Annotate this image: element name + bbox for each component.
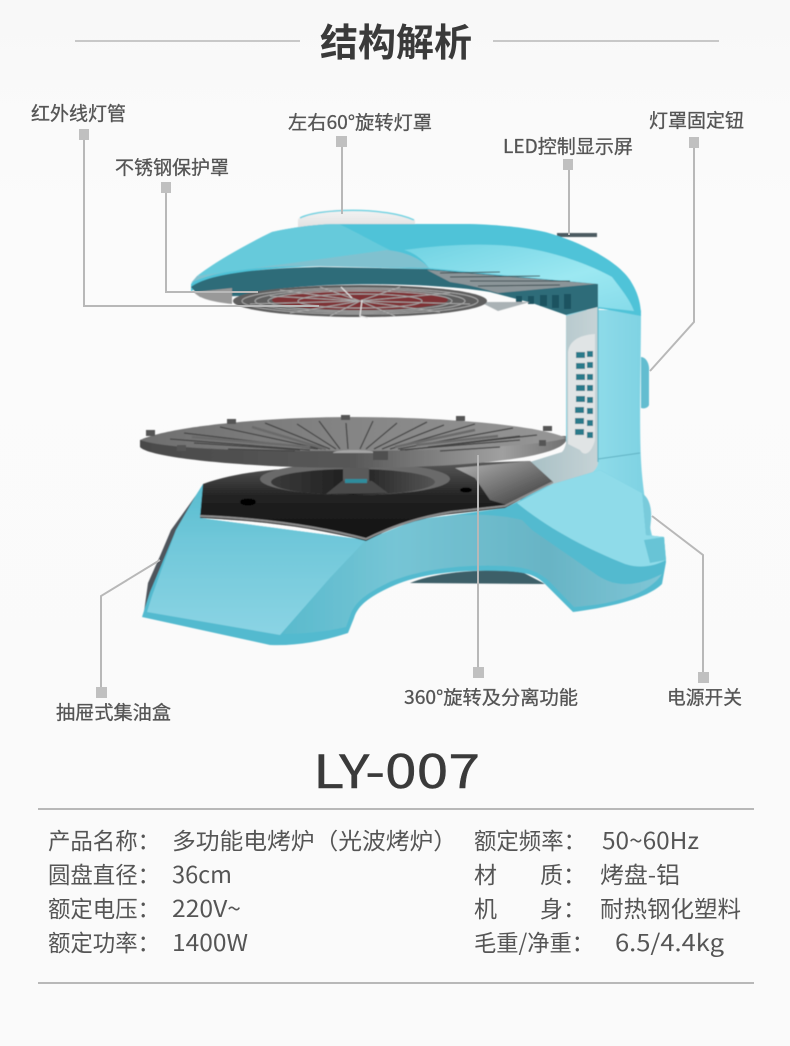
black tray plate: [200, 461, 553, 541]
spec: right column labels: 机: [474, 890, 497, 924]
product illustration: electric grill: [140, 209, 666, 645]
base shadow under arch: [410, 570, 545, 584]
spec: left column values: 1400W: [172, 924, 248, 958]
spec: right column values: 50~60Hz: [602, 822, 699, 856]
base body: [142, 470, 666, 645]
leader: 电源开关: [652, 516, 742, 710]
model name: LY-007: [313, 736, 480, 802]
infrared lamp and guard: [233, 285, 487, 318]
leader: 红外线灯管: 红外线灯管: [31, 99, 126, 126]
vent holes: [575, 351, 593, 438]
rotating stem and bowl: [260, 463, 450, 495]
title: 结构解析: 结构解析: [320, 12, 472, 67]
divider top: [38, 808, 754, 810]
spec: right column labels: 额定频率：: [474, 822, 586, 856]
column: [520, 307, 660, 590]
spec: right column labels: 材: [474, 856, 497, 890]
leader: 抽屉式集油盒: 抽屉式集油盒: [56, 698, 171, 725]
leader: 360°旋转及分离功能: [404, 455, 578, 710]
spec: right column values: 耐热钢化塑料: [600, 890, 741, 924]
leader: 抽屉式集油盒: [56, 560, 171, 725]
spec: right column values: 6.5/4.4kg: [615, 924, 724, 958]
hood: [191, 224, 641, 316]
spec: left column values: [172, 822, 457, 958]
spec: right column labels: 质：: [540, 856, 586, 890]
spec: right column labels: [474, 822, 594, 958]
spec: right column labels: 身：: [540, 890, 586, 924]
spec: left column values: 36cm: [172, 856, 232, 890]
spec: right column values: 烤盘-铝: [600, 856, 680, 890]
spec: right column labels: 毛重/净重：: [474, 924, 594, 958]
power switch: [643, 494, 651, 540]
LED control display: [557, 233, 597, 237]
lamp fixing knob: [641, 357, 649, 408]
leader: LED控制显示屏: [503, 132, 633, 235]
spec: left column labels: 额定功率：: [48, 924, 160, 958]
leader: 灯罩固定钮: [649, 106, 744, 371]
spec: left column values: 多功能电烤炉（光波烤炉）: [172, 822, 457, 856]
plate studs: [146, 415, 552, 451]
spec: left column values: 220V~: [172, 890, 241, 924]
leader: 不锈钢保护罩: [115, 153, 258, 292]
dome on top of hood: [298, 209, 415, 232]
divider bottom: [38, 982, 754, 984]
rotating round plate: [140, 415, 566, 468]
leader: 灯罩固定钮: 灯罩固定钮: [649, 106, 744, 133]
leader: 不锈钢保护罩: 不锈钢保护罩: [115, 153, 229, 180]
spec: left column labels: [48, 822, 160, 958]
plate spokes: [170, 421, 537, 451]
spec: left column labels: 圆盘直径：: [48, 856, 160, 890]
leader: 左右60°旋转灯罩: 左右60°旋转灯罩: [288, 108, 432, 135]
spec table: [48, 822, 741, 958]
leader: 左右60°旋转灯罩: [288, 108, 432, 214]
oil drawer side: [144, 484, 204, 612]
spec: left column labels: 产品名称：: [48, 822, 160, 856]
spec: left column labels: 额定电压：: [48, 890, 160, 924]
leader: LED控制显示屏: LED控制显示屏: [503, 132, 633, 159]
spec: right column values: [600, 822, 741, 958]
leader: 电源开关: 电源开关: [667, 683, 742, 710]
hood underside: [191, 267, 598, 315]
leader: 红外线灯管: [31, 99, 319, 306]
leader: 360°旋转及分离功能: 360°旋转及分离功能: [404, 683, 578, 710]
